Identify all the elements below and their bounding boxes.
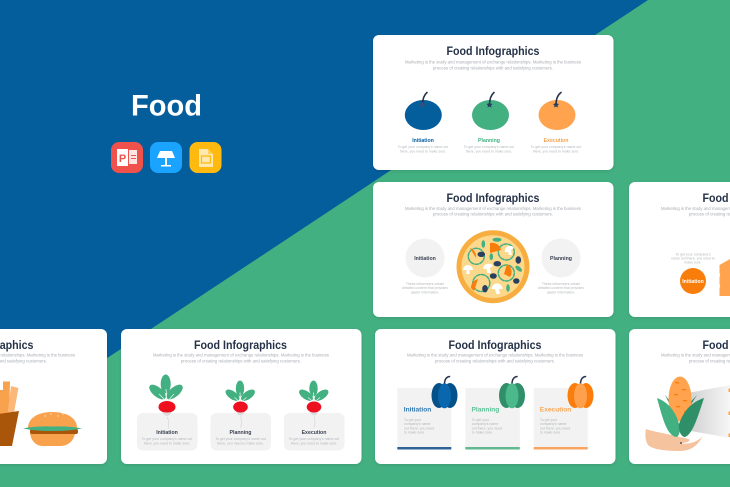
card: Planning — [210, 413, 271, 450]
text: detail: name out there, you need to — [671, 257, 715, 261]
description: process of creating relationships with and satisfying customers. — [433, 212, 553, 216]
panel: corn slide — [629, 329, 730, 464]
panel: pizza slide — [373, 182, 614, 317]
panel: pepper slide — [375, 329, 616, 464]
card: Initiation: Initiation — [404, 406, 431, 414]
card: Execution: To get your — [540, 418, 558, 422]
icon: cheese — [720, 259, 730, 296]
description: process of creating relationships with and satisfying customers. — [435, 358, 555, 364]
label: Initiation: there, you need to make sure. — [400, 150, 446, 154]
icon: Keynote — [150, 142, 182, 173]
card: Planning: to make sure. — [472, 431, 493, 435]
text: Initiation detail: These influencers create — [406, 282, 444, 286]
description — [407, 352, 584, 364]
description — [405, 206, 582, 216]
label: Planning: there, you need to make sure. — [466, 150, 512, 154]
heading: Food Infographics — [446, 193, 540, 205]
fan shape — [688, 385, 730, 438]
text: Planning detail — [538, 282, 584, 294]
circle: Planning: Planning — [550, 256, 572, 262]
panel: burger slide — [0, 329, 107, 464]
icon: green pepper — [499, 376, 525, 408]
label: Execution — [531, 138, 581, 154]
icon: corn in hand — [645, 376, 704, 451]
card: Execution — [284, 413, 344, 450]
heading: Food Infographics — [448, 340, 542, 352]
card: Execution: To get your company's name out — [289, 437, 339, 441]
card: Planning: company's name — [472, 422, 498, 426]
icon: radish medium — [224, 380, 257, 428]
label: Initiation: To get your company's name out — [398, 145, 448, 149]
card: Initiation: to make sure. — [404, 431, 425, 435]
panel: cheese slide — [629, 182, 730, 317]
label: Execution: there, you need to make sure. — [533, 150, 579, 154]
card: Planning: Planning — [230, 430, 251, 436]
icon: Google Slides — [190, 142, 222, 173]
icon: orange fruit — [538, 92, 576, 130]
circle: Initiation — [406, 238, 444, 278]
icon: pizza — [456, 230, 530, 303]
text: Initiation detail: useful information. — [411, 290, 439, 294]
description: Marketing is the study and management of exchange relationships. Marketing is the business — [153, 352, 330, 358]
description: process of creating relationships with and satisfying customers. — [433, 65, 553, 70]
description — [153, 352, 330, 364]
card: Initiation: there, you need to make sure. — [144, 441, 190, 445]
text: detail: make sure. — [684, 261, 702, 265]
card: Execution: to make sure. — [540, 431, 561, 435]
label: Execution: Execution — [544, 138, 568, 144]
icon: blue pepper — [432, 376, 458, 408]
description: Marketing is the study and management of exchange relationships. Marketing is the business — [405, 206, 582, 211]
description — [661, 206, 730, 216]
card: Execution: company's name — [540, 422, 566, 426]
icon: radish small — [297, 380, 330, 428]
card: Planning: there, you need to make sure. — [217, 441, 264, 445]
card: Planning — [465, 388, 520, 450]
card: Initiation: out there, you need — [404, 426, 434, 430]
description — [661, 352, 730, 364]
text: Planning detail: useful information. — [547, 290, 575, 294]
label: Initiation: Initiation — [412, 138, 434, 144]
text: Initiation detail — [402, 282, 448, 294]
text: Planning detail: detailed content that provides — [538, 286, 584, 290]
icon: fries — [0, 382, 19, 446]
panel: pumpkin slide — [373, 35, 614, 170]
card: Planning: To get your — [472, 418, 490, 422]
card: Execution — [534, 388, 588, 450]
circle: Planning — [542, 238, 580, 278]
panel: radish slide — [121, 329, 362, 464]
text: detail: To get your company's — [676, 252, 711, 256]
app icons — [111, 142, 222, 173]
description: Marketing is the study and management of exchange relationships. Marketing is the business — [407, 352, 584, 358]
icon: orange pepper — [568, 376, 594, 408]
icon: blue fruit — [405, 92, 442, 130]
card: Initiation: To get your company's name out — [142, 437, 192, 441]
card: Initiation: Initiation — [156, 430, 178, 436]
icon: green fruit — [472, 92, 509, 130]
card: Execution: Execution — [540, 406, 571, 414]
badge: Initiation: Initiation — [682, 279, 704, 285]
card: Initiation: company's name — [404, 422, 430, 426]
card: Initiation — [397, 388, 451, 450]
main title: Food — [131, 90, 202, 122]
label: Initiation — [398, 138, 448, 154]
card: Execution: there, you need to make sure. — [291, 441, 337, 445]
description — [0, 352, 76, 364]
card: Planning: To get your company's name out — [215, 437, 266, 441]
label: Planning: Planning — [478, 138, 500, 144]
card: Execution: out there, you need — [540, 426, 570, 430]
label: Execution: To get your company's name out — [531, 145, 581, 149]
text: detail — [671, 252, 715, 265]
description: Marketing is the study and management of exchange relationships. Marketing is the business — [405, 60, 582, 64]
icon: burger — [23, 412, 82, 446]
card: Execution: Execution — [302, 430, 326, 436]
label: Planning: To get your company's name out — [464, 145, 514, 149]
description — [405, 60, 582, 70]
description: process of creating relationships with and satisfying customers. — [181, 358, 301, 364]
card: Planning: Planning — [472, 406, 499, 414]
card: Initiation: To get your — [404, 418, 422, 422]
icon: PowerPoint: P — [119, 153, 126, 165]
label: Planning — [464, 138, 514, 154]
icon: radish large — [147, 374, 185, 429]
heading: Food Infographics — [446, 46, 540, 58]
markers — [728, 388, 730, 437]
heading: Food Infographics — [194, 340, 287, 352]
circle: Initiation: Initiation — [414, 256, 436, 262]
badge: Initiation — [680, 268, 706, 294]
card: Initiation — [137, 413, 198, 450]
card: Planning: out there, you need — [472, 426, 502, 430]
text: Initiation detail: detailed content that provides — [402, 286, 448, 290]
text: Planning detail: These influencers create — [542, 282, 580, 286]
